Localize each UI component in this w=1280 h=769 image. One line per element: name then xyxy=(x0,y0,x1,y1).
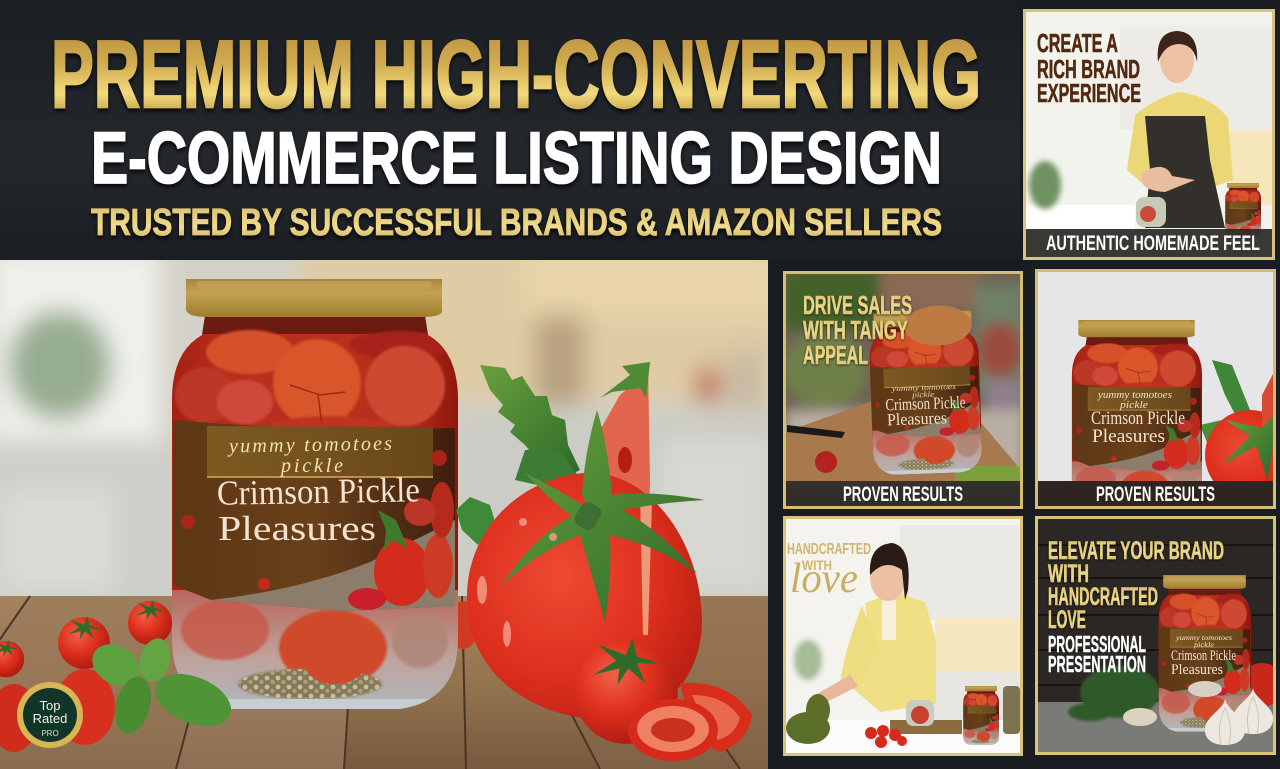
heading: HANDCRAFTED xyxy=(787,541,871,558)
jar label text: pickle xyxy=(1193,641,1214,649)
wooden table xyxy=(0,596,768,769)
heading: APPEAL xyxy=(803,340,868,370)
light studio background xyxy=(1038,272,1273,481)
panel frame xyxy=(1036,518,1274,754)
jar label text: yummy tomotoes xyxy=(1097,390,1172,401)
jar xyxy=(963,686,999,745)
jar label text: Pleasures xyxy=(1171,662,1223,678)
panel frame xyxy=(1024,10,1274,258)
jar label text xyxy=(1171,634,1236,678)
basil leaves xyxy=(92,638,231,734)
sauce dish on label xyxy=(1188,681,1222,697)
subheading: PROFESSIONAL xyxy=(1048,631,1146,657)
left tomato edge xyxy=(0,684,31,752)
jar xyxy=(1072,320,1202,481)
panel: drive sales with tangy appeal xyxy=(783,270,1025,509)
heading xyxy=(803,290,912,370)
tomato xyxy=(1240,663,1280,707)
heading: WITH xyxy=(1048,560,1089,588)
jar label text: Crimson Pickle xyxy=(1091,408,1185,429)
heading: DRIVE SALES xyxy=(803,290,912,320)
woman with apron xyxy=(1127,31,1233,228)
panel: studio jar with tomato xyxy=(1035,269,1280,517)
jar xyxy=(1158,575,1252,733)
tomatoes behind jar xyxy=(0,600,479,677)
heading xyxy=(1038,34,1141,102)
panel: elevate your brand xyxy=(1035,516,1280,756)
jar label text: yummy tomotoes xyxy=(1175,634,1232,642)
small jar xyxy=(1136,197,1166,227)
heading: WITH xyxy=(802,557,832,573)
small tomato and cut wedges xyxy=(574,638,752,761)
jar label text xyxy=(1092,392,1184,442)
badge: top rated pro: Top xyxy=(40,698,60,713)
blurred scene background xyxy=(783,270,1025,509)
title: e-commerce listing design: E-COMMERCE LISTING DESIGN xyxy=(91,118,942,199)
kitchen background xyxy=(1023,9,1275,260)
heading: WITH TANGY xyxy=(803,315,908,345)
herbs on counter xyxy=(786,694,830,744)
jar xyxy=(1225,183,1261,239)
heading: love xyxy=(790,556,858,602)
jar label text: yummy tomotoes xyxy=(227,433,392,457)
heading xyxy=(788,543,871,592)
jar label text xyxy=(218,438,419,540)
extra spice jar xyxy=(1003,686,1020,734)
caption bar: PROVEN RESULTS xyxy=(843,483,963,506)
bright kitchen background xyxy=(783,516,1023,756)
tilted jar with orange lid: Crimson Pickle xyxy=(885,393,966,414)
blurred kitchen background xyxy=(0,250,780,610)
heading: RICH BRAND xyxy=(1037,54,1140,84)
cutting board and tomatoes xyxy=(865,700,962,748)
tomato and leaves xyxy=(1202,360,1273,481)
jar label text: Crimson Pickle xyxy=(1171,648,1236,664)
jar label text: Crimson Pickle xyxy=(217,470,420,513)
subtitle: TRUSTED BY SUCCESSFUL BRANDS & AMAZON SELLERS xyxy=(91,202,942,244)
heading: HANDCRAFTED xyxy=(1048,583,1158,611)
woman in yellow shirt xyxy=(815,543,936,712)
subheading: PRESENTATION xyxy=(1048,651,1146,677)
header banner xyxy=(0,0,1020,260)
heading xyxy=(1048,537,1224,634)
panel: create a rich brand experience xyxy=(1023,9,1275,260)
badge: top rated pro xyxy=(17,682,83,748)
tilted jar with orange lid xyxy=(867,304,984,477)
panel frame xyxy=(784,272,1022,508)
panel: hero product scene xyxy=(0,250,780,769)
heading: CREATE A xyxy=(1037,28,1118,58)
jar label text: pickle xyxy=(1119,400,1149,411)
jar label text: Pleasures xyxy=(218,509,376,548)
badge: top rated pro: Rated xyxy=(33,711,67,726)
heading: EXPERIENCE xyxy=(1037,78,1141,108)
heading: LOVE xyxy=(1048,606,1086,634)
tilted jar with orange lid: Pleasures xyxy=(887,408,947,429)
panel frame xyxy=(784,518,1022,754)
large tomato with leaves xyxy=(456,362,705,720)
jar label text: pickle xyxy=(279,455,343,477)
product jar xyxy=(170,279,460,712)
badge: top rated pro: PRO xyxy=(41,729,59,738)
herbs xyxy=(1068,666,1160,721)
left tomato xyxy=(55,669,115,745)
caption bar xyxy=(1037,481,1274,507)
tilted jar with orange lid: pickle xyxy=(911,390,935,399)
subheading xyxy=(1048,631,1146,677)
caption bar xyxy=(785,481,1021,507)
garlic bulbs xyxy=(1123,688,1273,745)
panel: handcrafted with love xyxy=(783,516,1023,756)
jar label text: Pleasures xyxy=(1092,426,1165,447)
tilted jar with orange lid: yummy tomotoes xyxy=(891,382,956,393)
dark wood background and stone counter xyxy=(1035,516,1276,756)
panel frame xyxy=(1036,270,1274,508)
